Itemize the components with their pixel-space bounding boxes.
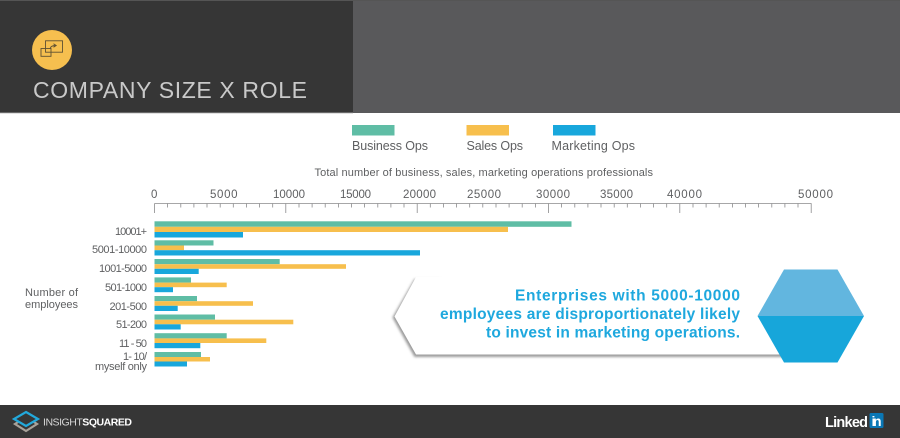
logo: LinkedIn	[825, 413, 884, 431]
icon: hexagon	[758, 270, 864, 362]
x axis: 30000	[536, 189, 570, 201]
x axis: 50000	[798, 189, 833, 201]
y axis labels: 1- 10/	[123, 351, 148, 363]
x axis: 20000	[403, 189, 436, 201]
x axis: 35000	[600, 189, 633, 201]
x axis: 40000	[667, 189, 702, 201]
bar chart	[154, 221, 572, 366]
x axis: 15000	[340, 189, 371, 201]
legend: Marketing Ops	[552, 139, 635, 153]
x axis: 5000	[210, 189, 238, 201]
y axis labels: 51-200	[116, 319, 147, 331]
logo: InsightSquared: INSIGHTSQUARED	[43, 416, 132, 428]
title: COMPANY SIZE X ROLE	[33, 77, 307, 103]
y axis labels: myself only	[95, 361, 148, 373]
y axis title	[25, 287, 79, 311]
footer band	[0, 405, 900, 438]
logo: LinkedIn: Linked	[825, 415, 868, 431]
x axis: 0	[151, 189, 157, 201]
icon: resize windows	[32, 30, 72, 70]
y axis title: employees	[25, 299, 78, 311]
legend	[352, 125, 635, 153]
x axis	[151, 189, 833, 213]
legend: Sales Ops	[466, 139, 523, 153]
y axis labels: 11 - 50	[119, 338, 147, 350]
callout: employees are disproportionately likely	[440, 306, 740, 323]
y axis labels: 10001+	[115, 226, 147, 238]
callout: Enterprises with 5000-10000	[515, 288, 740, 304]
callout	[392, 277, 790, 357]
axis title: Total number of business, sales, marketing operations professionals	[314, 167, 654, 179]
x axis: 25000	[467, 189, 501, 201]
y axis labels: 201-500	[110, 301, 147, 313]
y axis title: Number of	[25, 287, 79, 299]
logo: LinkedIn: in	[872, 413, 882, 429]
legend: Business Ops	[352, 139, 428, 153]
y axis labels	[92, 226, 148, 373]
y axis labels: 5001-10000	[92, 244, 147, 256]
callout: to invest in marketing operations.	[486, 324, 740, 342]
x axis: 10000	[273, 189, 305, 201]
header band	[0, 0, 900, 113]
logo: InsightSquared	[14, 412, 132, 431]
y axis labels: 501-1000	[105, 282, 147, 294]
y axis labels: 1001-5000	[99, 263, 147, 275]
